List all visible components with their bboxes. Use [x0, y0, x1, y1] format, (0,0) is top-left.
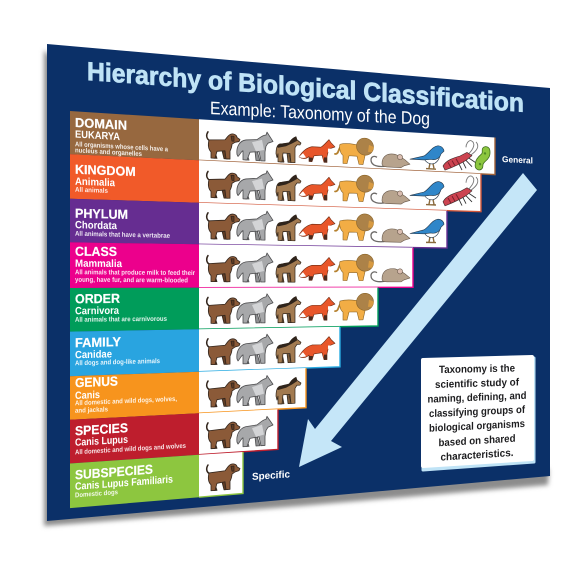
board background	[47, 44, 550, 521]
row: kingdom: KINGDOM	[75, 162, 136, 179]
row: kingdom: All animals	[75, 187, 108, 195]
row: kingdom: Animalia	[75, 176, 115, 189]
row: family: FAMILY	[75, 334, 121, 350]
row: subspecies	[70, 452, 243, 508]
row: family: Canidae	[75, 348, 112, 361]
row: phylum: Chordata	[75, 219, 117, 232]
row: genus: and jackals	[75, 406, 108, 415]
callout: taxonomy definition: classifying groups of	[429, 404, 525, 420]
row: kingdom	[70, 154, 481, 212]
row: genus: Canis	[75, 389, 100, 402]
row: phylum: PHYLUM	[75, 206, 128, 222]
row: genus	[70, 366, 306, 420]
row: order: All animals that are carnivorous	[75, 316, 167, 324]
row: class: All animals that produce milk to feed their	[75, 269, 195, 277]
row: genus: GENUS	[75, 373, 118, 390]
subtitle: Example: Taxonomy of the Dog	[210, 98, 430, 129]
callout: taxonomy definition	[423, 357, 534, 470]
row: order	[70, 287, 378, 332]
row: species	[70, 409, 278, 464]
row: class: Mammalia	[75, 258, 122, 270]
row: order: ORDER	[75, 291, 121, 306]
row: subspecies: SUBSPECIES	[75, 461, 153, 482]
row: subspecies: Domestic dogs	[75, 489, 118, 499]
callout: taxonomy definition: based on shared	[438, 433, 516, 449]
row: phylum	[70, 199, 447, 248]
row: family	[70, 327, 340, 376]
label: specific: Specific	[252, 469, 290, 483]
callout: taxonomy definition: naming, defining, and	[428, 390, 526, 406]
row: family: All dogs and dog-like animals	[75, 358, 160, 367]
row: class: young, have fur, and are warm-blooded	[75, 277, 188, 284]
row: species: All domestic and wild dogs and wolves	[75, 443, 186, 456]
row: class: CLASS	[75, 244, 117, 259]
callout: taxonomy definition: characteristics.	[440, 447, 514, 464]
row: class	[70, 242, 413, 288]
callout: taxonomy definition: biological organisms	[429, 418, 525, 435]
arrow: general to specific	[299, 173, 537, 467]
title: Hierarchy of Biological Classification	[87, 56, 524, 118]
row: domain: DOMAIN	[75, 115, 127, 133]
row: species: SPECIES	[75, 420, 128, 438]
row: domain: All organisms whose cells have a	[75, 141, 168, 153]
callout: taxonomy definition: scientific study of	[435, 376, 519, 391]
row: phylum: All animals that have a vertabrae	[75, 231, 170, 240]
callout: taxonomy definition: Taxonomy is the	[439, 363, 515, 376]
row: domain: EUKARYA	[75, 129, 120, 143]
label: general: General	[502, 154, 533, 166]
row: order: Carnivora	[75, 305, 119, 317]
row: domain: nucleus and organelles	[75, 147, 142, 158]
row: domain	[70, 111, 495, 177]
row: genus: All domestic and wild dogs, wolves,	[75, 396, 177, 407]
row: species: Canis Lupus	[75, 434, 128, 449]
board shadow	[44, 50, 549, 526]
row: subspecies: Canis Lupus Familiaris	[75, 473, 173, 493]
